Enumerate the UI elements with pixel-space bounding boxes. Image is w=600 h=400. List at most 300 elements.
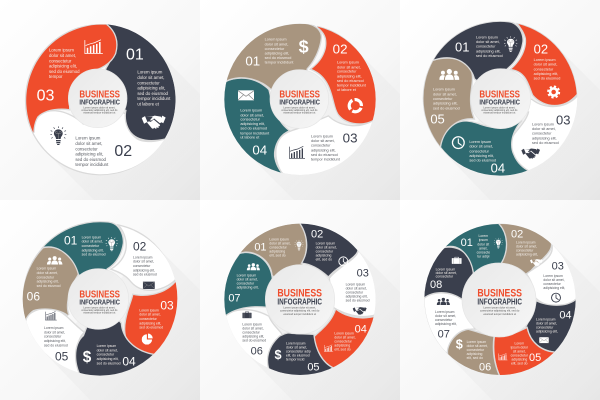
number 01: 01 [126,46,144,63]
icon: dollar: $ [299,36,309,56]
text block 06: consectetur [37,275,55,279]
text block 01: dolor sit amet, [269,242,291,246]
icon: light bulb [295,240,303,250]
text block 02: consectetur [534,67,554,71]
text block 01: dolor sit amet, [476,40,500,44]
segment 02 tan [500,224,551,275]
text block 01: tempor incididunt [265,61,294,65]
text block 02: sed do eiusmod [75,157,106,162]
text block 04 [334,332,356,352]
number 01: 01 [455,40,469,55]
number 04: 04 [559,310,572,322]
text block 02: tempor incididunt [75,162,109,167]
text block 07: consectetur [237,281,255,285]
text block 07: dolor sit amet, [237,277,258,281]
icon: clock [339,257,348,266]
center title [79,290,120,315]
icon: briefcase [452,257,462,264]
text block 05: sed do eiusmod [433,106,460,110]
text block 03 [139,308,163,330]
text block 02: adipisicing [316,254,332,258]
text block 04: dolor sit amet, [97,348,118,352]
segment 02 navy [301,223,357,276]
text block 06: Lorem ipsum [242,322,262,326]
segment 06 white [234,309,282,368]
number 06: 06 [251,345,263,357]
center title: eiusmod tempor incididunt ut [83,312,116,315]
segment 04 teal [224,79,288,173]
center title: consectetur adipisicing elit, sed do [81,109,118,112]
text block 03: dolor sit amet, [346,286,367,290]
text block 04: Lorem ipsum [240,109,262,113]
text block 01: elit, sed do [269,254,286,258]
text block 04: consectetur [536,325,554,329]
number 03: 03 [343,131,357,146]
text block 03: Lorem ipsum [139,308,159,312]
center title: consectetur adipisicing elit, sed do [480,310,520,313]
text block 02: consectetur [75,146,98,151]
icon: chart [289,146,305,159]
segment 03 red [26,25,116,133]
center title: Lorem ipsum dolor sit amet, [283,106,316,109]
segment 06 tan [22,248,78,321]
center title [279,90,320,115]
text block 01: adipisicing elit, [265,52,289,56]
text block 06: adipisicing elit, [242,334,264,338]
text block 05: Lorem [515,342,524,346]
text block 03: consectetur [311,144,331,148]
text block 03: sed do eiusmod [139,326,163,330]
icon: envelope [238,90,254,100]
text block 05: elit, sed do [511,362,528,366]
text block 02: adipisicing elit, [337,74,362,78]
icon: dollar: $ [274,348,282,362]
text block 01: Lorem [479,234,488,238]
text block 02: consectetur [516,249,534,253]
icon: people [437,298,450,305]
text block 02: adipisicing elit, [534,72,558,76]
ring of segments [22,222,179,377]
text block 04: dolor sit amet, [536,321,557,325]
number 03: 03 [160,299,174,313]
text block 06: dolor sit amet, [467,344,488,348]
text block 01: sed do eiusmod [82,253,106,257]
text block 05: sit amet, [513,350,526,354]
text block 02: adipisicing elit, [75,152,103,157]
number 03: 03 [556,112,570,127]
panel 6: eight-step cycle [424,224,600,400]
text block 06 [467,340,488,360]
segment 03 white [512,96,578,170]
center title: Lorem ipsum dolor sit amet, [83,306,116,309]
text block 03: consectetur [543,282,562,286]
center disc [270,70,329,128]
number 04: 04 [355,324,367,336]
text block 02: dolor sit amet, [316,246,337,250]
icon: clock [452,137,464,149]
text block 02: Lorem ipsum [133,255,153,259]
center title: Lorem ipsum dolor sit amet, [283,307,316,310]
segment 01 tan [226,24,322,90]
text block 02: adipisicing elit, [516,253,538,257]
text block 06: consectetur [467,348,485,352]
text block 04: consectetur [469,149,490,153]
segment 03 orange [125,281,179,355]
center title: consectetur adipisicing elit, sed do [281,109,318,112]
center title: eiusmod tempor incididunt ut [283,313,316,316]
text block 05: adipisicing [511,358,527,362]
text block 01: tempor incididunt [137,96,171,101]
center title [477,288,522,316]
text block 05: sed do eiusmod [44,343,68,347]
number 02: 02 [133,240,147,254]
center title: INFOGRAPHIC [279,97,320,106]
text block 03: Lorem ipsum [543,274,563,278]
center title: BUSINESS [79,90,120,101]
text block 03: consectetur [139,317,158,321]
text block 07: adipisicing elit, [435,322,457,326]
text block 02 [133,255,157,277]
text block 04: elit, sed do [334,348,351,352]
text block 02: sed do eiusmod [534,77,560,81]
segment 02 orange [512,24,577,105]
ring of segments [424,22,578,177]
text block 04: ut labore et [240,136,260,140]
center title: Lorem ipsum dolor sit amet, [483,307,516,310]
number 05: 05 [529,352,541,364]
segment 04 teal [441,120,529,177]
center title: BUSINESS [279,90,320,101]
text block 04: sed do eiusmod [469,159,496,163]
text block 01: dolor sit amet, [82,240,103,244]
text block 02: Lorem ipsum [337,61,359,65]
ring of segments [224,223,377,376]
center disc [471,69,531,129]
number 07: 07 [438,329,450,341]
panel 4: six-step cycle [22,221,200,400]
segment 05 navy [268,334,333,376]
text block 05: Lorem ipsum [44,326,64,330]
text block 04 [97,344,121,365]
text block 02 [316,242,337,262]
text block 01: tur adipi [477,254,490,258]
icon: dollar: $ [83,349,92,366]
icon: chart [45,311,57,320]
text block 04: adipisicing elit, [240,122,265,126]
segment 03 white [330,252,377,316]
text block 01: consectetur [82,244,100,248]
center title: INFOGRAPHIC [277,296,322,306]
text block 03 [543,274,565,290]
panel 3: five-step cycle [422,21,600,200]
icon: cycle [348,98,363,113]
segment 01 navy [100,24,176,140]
text block 03 [49,48,80,79]
text block 02: Lorem ipsum [75,136,101,141]
panel 1: three-step cycle [24,24,200,200]
text block 01: dolor sit [477,242,489,246]
text block 02: dolor sit amet, [516,245,537,249]
text block 01: consecte [477,250,490,254]
text block 03: adipisicing elit, [346,294,368,298]
text block 04: consectetur [240,118,261,122]
text block 01: ut labore et [137,101,160,106]
text block 01: consectetur [265,47,285,51]
icon: briefcase [242,312,252,318]
segment 04 navy [74,321,154,376]
text block 08: dolor sit amet, [436,271,457,275]
center title [479,90,520,115]
ring of segments [224,24,376,176]
text block 01 [477,234,490,258]
number 07: 07 [228,292,241,304]
text block 01: Lorem ipsum [476,35,498,39]
icon: pie chart [142,334,153,345]
text block 02: consectetur [316,250,334,254]
text block 03 [346,282,370,302]
center title: eiusmod tempor incididunt ut [483,313,516,316]
center title [277,288,322,316]
text block 02 [337,61,367,92]
number 03: 03 [357,267,369,279]
text block 05: Lorem ipsum [433,88,455,92]
long shadow [446,246,600,400]
text block 01: consectetur [476,45,496,49]
text block 02 [516,241,538,257]
icon: clock [552,293,560,302]
text block 01 [82,235,106,257]
center title: BUSINESS [477,288,522,300]
text block 06: dolor sit amet, [37,271,58,275]
text block 01: consectetur [137,80,160,85]
text block 04: Lorem ipsum [334,332,354,336]
text block 01: Lorem ipsum [137,70,163,75]
icon: light bulb [106,237,118,251]
center title: INFOGRAPHIC [479,97,520,106]
text block 03: adipisicing elit, [49,64,77,69]
number 01: 01 [245,54,260,69]
text block 02: Lorem ipsum [534,58,556,62]
segment 04 navy [527,300,576,352]
text block 04: dolor sit amet, [469,145,493,149]
text block 05: consectetur [511,354,529,358]
segment 01 teal [446,224,506,274]
text block 01: sed do eiusmod [137,91,168,96]
text block 04: adipisicing elit, [536,329,558,333]
text block 02: sed do eiusmod [337,79,364,83]
center title: Lorem ipsum dolor sit amet, [83,106,116,109]
number 01: 01 [64,234,78,248]
icon: handshake [142,116,166,129]
icon: light bulb [50,126,66,145]
text block 02: dolor sit amet, [534,63,557,67]
center title: consectetur adipisicing elit, sed do [81,309,118,312]
text block 03: dolor sit amet, [543,278,565,282]
text block 02: elit, sed do [316,258,332,262]
text block 06 [37,267,61,288]
text block 06: sed do eiusmod [37,284,61,288]
text block 04: Lorem ipsum [469,140,491,144]
text block 05 [511,342,529,366]
text block 05: consectetur adip [286,350,311,354]
text block 03: adipisicing elit, [543,286,565,290]
text block 02: sed do eiusmod [133,273,157,277]
center disc [68,269,129,329]
text block 03: adipisicing elit, [532,136,557,140]
number 04: 04 [252,142,268,157]
text block 04: dolor sit amet, [334,336,356,340]
panel 5: seven-step cycle [224,224,400,400]
text block 07 [237,273,259,289]
long shadow [445,45,600,200]
center title: eiusmod tempor incididunt ut [483,112,516,115]
icon: people [439,69,459,80]
text block 08: Lorem ipsum [436,267,455,271]
segment 01 navy [433,21,524,81]
text block 03: sed do eiusmod [346,298,370,302]
long shadow [45,245,200,400]
text block 05: dolor sit amet, [44,330,65,334]
text block 05 [286,342,311,362]
segment 08 navy [424,248,474,299]
text block 02: Lorem ipsum [516,241,536,245]
segment 07 white [425,294,474,353]
text block 03: adipisicing elit, [311,148,336,152]
text block 04 [240,109,270,140]
number 08: 08 [430,279,442,291]
text block 07: adipisicing elit, [237,285,259,289]
text block 02: Lorem ipsum [316,242,335,246]
text block 03: dolor sit amet, [49,53,76,58]
text block 05: Lorem ipsum [286,342,306,346]
text block 05 [433,88,460,110]
text block 05: consectetur [433,97,453,101]
icon: chart [324,345,333,352]
text block 02: dolor sit amet, [337,65,361,69]
icon: people [247,263,260,270]
number 06: 06 [479,361,491,373]
center title: BUSINESS [277,288,322,300]
center title: INFOGRAPHIC [79,297,120,306]
text block 01: adipisicing elit, [82,248,104,252]
center title: INFOGRAPHIC [477,296,522,306]
text block 01: sed do eiusmod [476,54,503,58]
segment 06 tan [448,330,499,375]
text block 01: adipisicing elit, [476,49,501,53]
text block 05: consectetur [44,335,62,339]
icon: chart [84,40,103,54]
number 02: 02 [534,41,548,56]
icon: dollar: $ [456,338,463,352]
text block 04: consectetur [334,340,353,344]
text block 03: tempor incididunt [311,158,341,162]
icon: handshake [530,259,543,266]
long shadow [247,47,400,200]
text block 03: Lorem ipsum [532,122,554,126]
icon: chart [499,353,507,360]
segment 05 orange [494,328,554,375]
text block 01: dolor sit amet, [137,75,165,80]
text block 03: consectetur [346,290,364,294]
text block 06: adipisicing [467,352,483,356]
text block 06: dolor sit amet, [242,326,264,330]
text block 01: sed do eiusmod [265,56,291,60]
text block 02: ut labore et [337,88,357,92]
text block 06: sed do eiusmod [242,338,266,342]
center disc [68,69,127,128]
icon: gear [548,86,559,98]
center disc [265,265,335,334]
text block 02: adipisicing elit, [133,268,155,272]
text block 03: consectetur [532,132,552,136]
segment 03 white [527,245,576,305]
text block 05: tempor incid [286,358,305,362]
text block 01 [476,35,503,58]
segment 05 white [26,309,83,374]
text block 04: adipisicing elit, [469,154,494,158]
segment 02 white [112,226,176,290]
number 01: 01 [254,241,267,253]
number 04: 04 [122,355,136,369]
icon: people [47,256,62,265]
text block 04: adipisicing [334,344,350,348]
text block 01: adipisicing elit, [137,86,165,91]
text block 01: Lorem ipsum [265,38,287,42]
text block 02: tempor incididunt [337,84,367,88]
icon: light bulb [504,36,517,52]
long shadow [47,47,200,200]
text block 05: dolor sit amet, [433,92,457,96]
center title: Lorem ipsum dolor sit amet, [483,106,516,109]
text block 03: dolor sit amet, [311,139,335,143]
text block 03: Lorem ipsum [49,48,74,53]
segment 03 white [276,117,374,176]
text block 06 [242,322,266,342]
text block 03: tempor [49,74,63,79]
center title: eiusmod tempor incididunt ut [283,112,316,115]
segment 05 tan [424,59,473,146]
icon: handshake [521,148,540,159]
text block 05: adipisicing elit, [433,102,458,106]
number 04: 04 [491,160,505,175]
icon: light bulb [494,238,503,248]
text block 03 [532,122,559,145]
text block 07: Lorem ipsum [237,273,256,277]
text block 04: tempor incididunt [240,131,270,135]
number 02: 02 [333,42,347,57]
ring of segments [424,224,576,375]
text block 08: consectetur [436,275,454,279]
text block 04: Lorem ipsum [97,344,116,348]
center title: INFOGRAPHIC [79,97,120,106]
text block 07: Lorem ipsum [435,310,455,314]
text block 06: Lorem ipsum [37,267,56,271]
panel 2: four-step cycle [224,24,400,200]
text block 08 [436,267,457,279]
center title: BUSINESS [479,90,520,101]
text block 05: dolor sit amet, [286,346,307,350]
text block 03: sed do eiusmod [532,141,559,145]
text block 03: adipisicing elit, [139,321,161,325]
text block 02: dolor sit amet, [75,141,103,146]
text block 03: Lorem ipsum [311,134,333,138]
number 06: 06 [27,290,40,304]
text block 04 [536,317,558,333]
text block 01 [265,38,294,65]
number 02: 02 [114,143,132,160]
text block 04: Lorem ipsum [536,317,556,321]
text block 03: dolor sit amet, [532,127,556,131]
